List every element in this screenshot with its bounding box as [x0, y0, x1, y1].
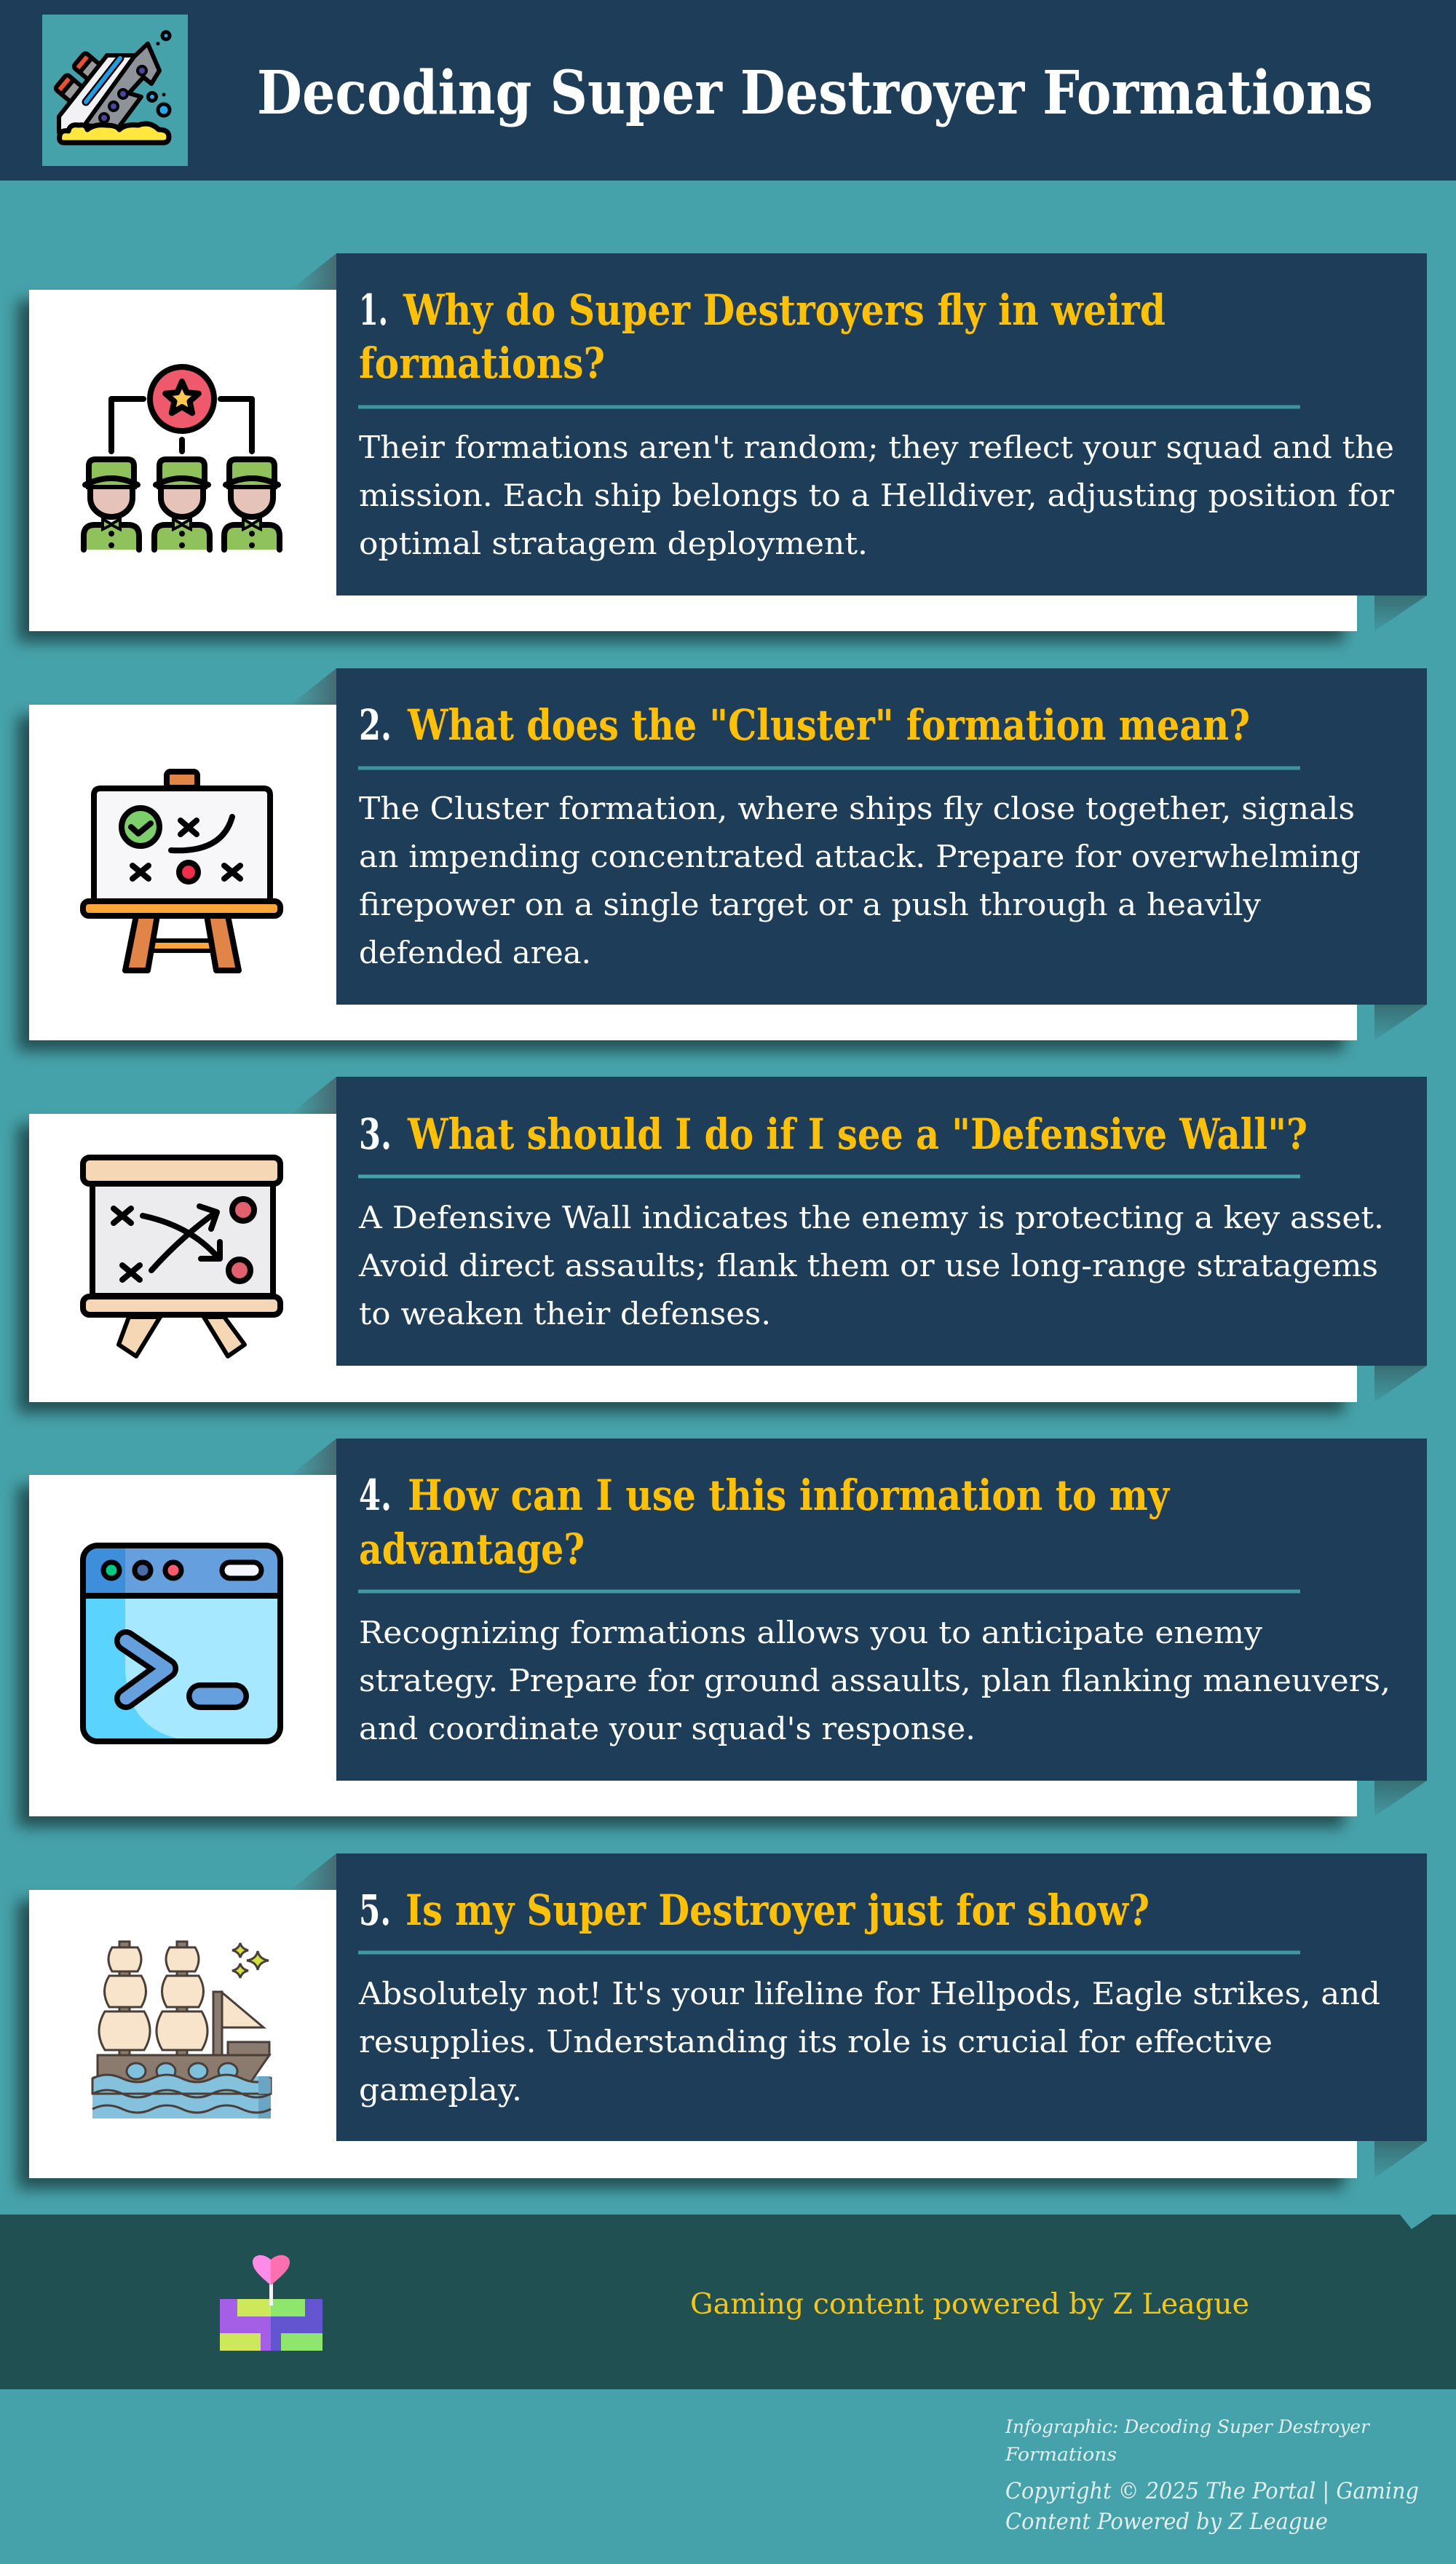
- heading: question 4: 4.: [359, 1471, 392, 1520]
- icon: terminal window: [83, 1546, 280, 1741]
- answer text 5: resupplies. Understanding its role is crucial for effective: [359, 2024, 1273, 2059]
- heading: question 1: [359, 285, 1166, 388]
- answer text 4: Recognizing formations allows you to anticipate enemy: [359, 1615, 1262, 1650]
- answer text 2: defended area.: [359, 935, 591, 970]
- answer text 2: The Cluster formation, where ships fly close together, signals: [359, 791, 1355, 826]
- heading: question 5: Is my Super Destroyer just for show?: [405, 1886, 1150, 1935]
- heading: question 3: 3.: [359, 1109, 392, 1159]
- answer text 4: and coordinate your squad's response.: [359, 1711, 976, 1746]
- answer text 1: mission. Each ship belongs to a Helldiver, adjusting position for: [359, 478, 1395, 513]
- answer text 2: firepower on a single target or a push through a heavily: [359, 887, 1261, 922]
- icon: strategy board: [83, 1158, 280, 1356]
- answer text 4: [359, 1615, 1390, 1746]
- panel: question 4: [17, 1439, 1427, 1827]
- heading: question 4: How can I use this information to my: [408, 1471, 1171, 1520]
- answer text 3: A Defensive Wall indicates the enemy is protecting a key asset.: [358, 1200, 1384, 1235]
- answer text 4: strategy. Prepare for ground assaults, plan flanking maneuvers,: [359, 1663, 1390, 1698]
- answer text 5: Absolutely not! It's your lifeline for Hellpods, Eagle strikes, and: [358, 1976, 1380, 2011]
- heading: question 4: [359, 1471, 1171, 1574]
- attribution text: [1005, 2416, 1419, 2535]
- attribution text: Formations: [1005, 2444, 1117, 2465]
- icon: Z League logo: [220, 2255, 323, 2351]
- answer text 5: [358, 1976, 1380, 2108]
- header band: [0, 0, 1456, 181]
- heading: question 3: What should I do if I see a "Defensive Wall"?: [407, 1109, 1307, 1159]
- answer text 5: gameplay.: [359, 2072, 522, 2108]
- panel: question 1: [17, 253, 1427, 642]
- answer text 1: optimal stratagem deployment.: [359, 526, 868, 561]
- answer text 3: Avoid direct assaults; flank them or use long-range stratagems: [358, 1248, 1378, 1283]
- heading: question 1: 1.: [359, 285, 388, 335]
- heading: question 1: Why do Super Destroyers fly in weird: [403, 285, 1166, 335]
- answer text 1: Their formations aren't random; they reflect your squad and the: [359, 430, 1394, 465]
- icon: squad hierarchy: [84, 367, 280, 550]
- heading: question 1: formations?: [359, 339, 605, 388]
- answer text 2: [359, 791, 1361, 970]
- icon: tactics easel: [83, 772, 280, 970]
- icon: sailing ship: [92, 1942, 271, 2118]
- panel: question 2: [17, 668, 1427, 1051]
- heading: question 4: advantage?: [359, 1524, 585, 1574]
- icon: sinking ship logo: [42, 15, 188, 166]
- answer text 3: to weaken their defenses.: [359, 1296, 771, 1332]
- answer text 3: [358, 1200, 1384, 1332]
- panel: question 3: [17, 1077, 1427, 1413]
- panel: question 5: [17, 1853, 1427, 2189]
- attribution text: Infographic: Decoding Super Destroyer: [1005, 2416, 1371, 2437]
- heading: question 5: 5.: [359, 1886, 391, 1935]
- footer tagline: Gaming content powered by Z League: [690, 2288, 1249, 2321]
- attribution text: Copyright © 2025 The Portal | Gaming: [1005, 2478, 1419, 2504]
- heading: question 2: 2.: [359, 700, 392, 750]
- footer band: [0, 2215, 1456, 2389]
- answer text 2: an impending concentrated attack. Prepare for overwhelming: [359, 839, 1361, 874]
- heading: question 2: What does the "Cluster" formation mean?: [407, 700, 1250, 750]
- answer text 1: [359, 430, 1395, 561]
- attribution text: Content Powered by Z League: [1005, 2509, 1328, 2535]
